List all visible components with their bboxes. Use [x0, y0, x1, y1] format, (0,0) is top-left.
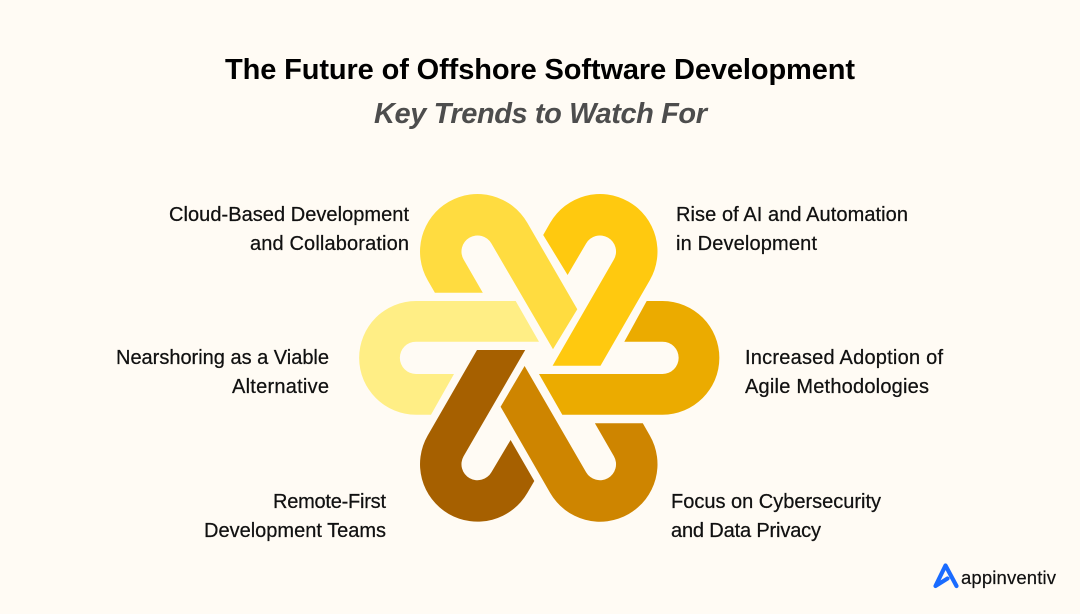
link: brown, remote-first	[420, 350, 534, 522]
label: remote-first	[204, 491, 386, 542]
link: amber, agile	[539, 301, 719, 415]
title: The Future of Offshore Software Development	[225, 54, 855, 86]
wordmark: appinventiv	[961, 567, 1057, 588]
link: golden yellow, AI	[543, 194, 657, 366]
label: nearshoring: Nearshoring as a Viable	[116, 347, 329, 369]
knot diagram	[359, 194, 719, 522]
label: cloud-based: Cloud-Based Development	[169, 204, 409, 226]
link: pale yellow, nearshoring	[359, 301, 539, 415]
subtitle: Key Trends to Watch For	[374, 98, 709, 130]
label: cloud-based: and Collaboration	[250, 233, 409, 255]
label: cybersecurity: Focus on Cybersecurity	[671, 491, 881, 513]
label: agile	[745, 347, 943, 398]
link: light yellow, cloud	[420, 194, 577, 349]
label: AI and automation: in Development	[676, 233, 817, 255]
logo: appinventiv	[936, 566, 1057, 588]
label: cybersecurity	[671, 491, 881, 542]
label: nearshoring	[116, 347, 329, 398]
label: remote-first: Remote-First	[273, 491, 386, 513]
icon: logo triangle	[936, 566, 956, 586]
label: nearshoring: Alternative	[232, 376, 329, 398]
label: remote-first: Development Teams	[204, 520, 386, 542]
label: cybersecurity: and Data Privacy	[671, 520, 821, 542]
label: agile: Agile Methodologies	[745, 376, 929, 398]
label: AI and automation: Rise of AI and Automation	[676, 204, 908, 226]
label: cloud-based	[169, 204, 409, 255]
label: AI and automation	[676, 204, 908, 255]
label: agile: Increased Adoption of	[745, 347, 943, 369]
link: orange, cybersecurity	[501, 366, 658, 522]
